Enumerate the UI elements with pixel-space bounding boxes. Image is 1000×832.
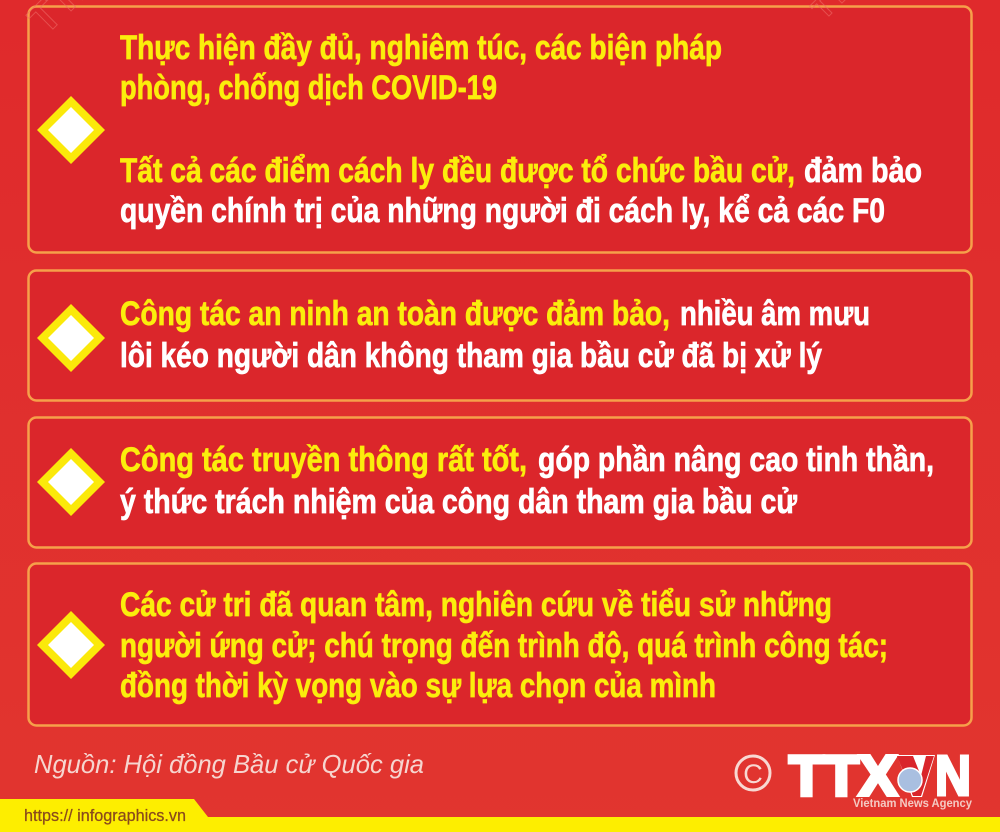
footer url: https:// infographics.vn (24, 807, 186, 825)
source text: Nguồn: Hội đồng Bầu cử Quốc gia (34, 749, 424, 779)
text: panel 2 lines: lôi kéo người dân không tham gia bầu cử đã bị xử lý (120, 337, 822, 375)
text: panel 4 lines: đồng thời kỳ vọng vào sự lựa chọn của mình (120, 667, 716, 705)
icon: diamond 3 (37, 448, 105, 516)
text: panel 3 lines: ý thức trách nhiệm của công dân tham gia bầu cử (120, 483, 797, 521)
logo: copyright symbol: C (743, 759, 763, 789)
text: panel 1 lines (120, 29, 922, 230)
text: panel 2 lines (120, 295, 870, 375)
text: panel 1 lines: Thực hiện đầy đủ, nghiêm túc, các biện pháp (120, 29, 722, 67)
text: panel 4 lines (120, 586, 888, 705)
logo: TTXVN: TTX (789, 744, 897, 808)
text: panel 1 lines: đảm bảo (804, 152, 922, 190)
text: panel 2 lines: Công tác an ninh an toàn được đảm bảo, (120, 295, 670, 333)
text: panel 4 lines: Các cử tri đã quan tâm, nghiên cứu về tiểu sử những (120, 586, 832, 624)
footer bar (0, 799, 1000, 832)
logo: TTXVN: N (935, 744, 971, 808)
text: panel 1 lines: phòng, chống dịch COVID-19 (120, 69, 497, 107)
text: panel 1 lines: Tất cả các điểm cách ly đều được tổ chức bầu cử, (120, 152, 795, 190)
logo: TTXVN: Vietnam News Agency (853, 798, 973, 810)
text: panel 3 lines: Công tác truyền thông rất tốt, (120, 441, 527, 479)
panel: security (28, 270, 972, 400)
icon: diamond 1 (37, 96, 105, 164)
icon: diamond 4 (37, 611, 105, 679)
text: panel 3 lines (120, 441, 934, 521)
icon: diamond 2 (37, 304, 105, 372)
panel: communication (28, 418, 972, 548)
logo: TTXVN (789, 744, 973, 810)
panel: voters (28, 564, 972, 726)
text: panel 2 lines: nhiều âm mưu (680, 295, 870, 333)
logo: copyright symbol (736, 756, 770, 790)
panel: COVID-19 measures (28, 6, 972, 252)
